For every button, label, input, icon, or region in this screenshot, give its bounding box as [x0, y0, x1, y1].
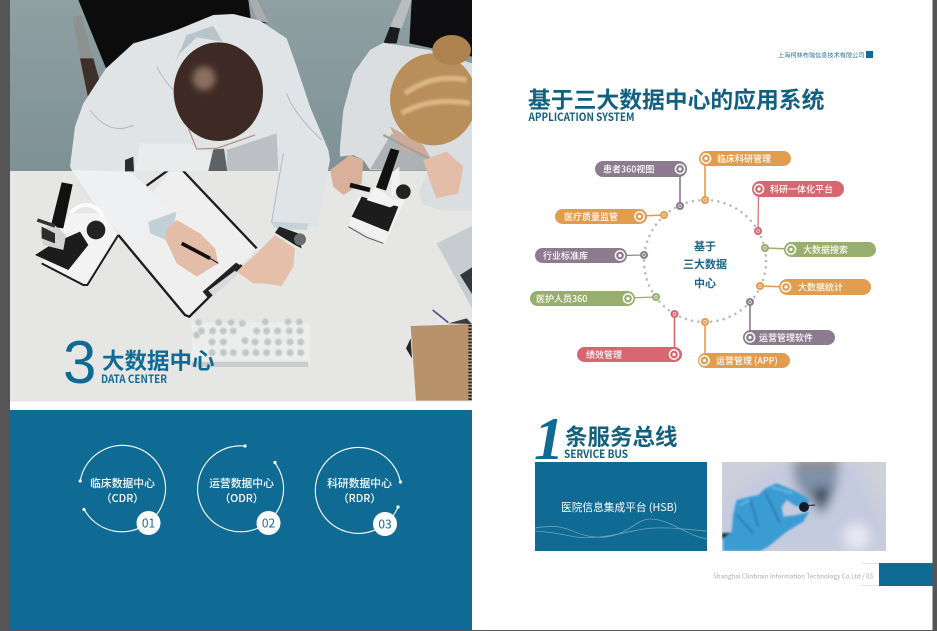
item: research platform: 科研一体化平台 [770, 182, 833, 195]
ring centre text: 三大数据 [683, 256, 727, 272]
data center 01: 01 [142, 514, 155, 532]
item: industry standards [535, 248, 648, 263]
photo: scientists at a lab table [10, 0, 477, 402]
item: patient 360: 患者360视图 [603, 162, 654, 175]
panel: HSB integration platform: 医院信息集成平台 (HSB) [561, 500, 677, 515]
section heading: 1 service bus: 条服务总线 [565, 420, 678, 452]
chairs [78, 0, 268, 68]
data center 03 [315, 447, 402, 536]
item: clinical research [699, 151, 791, 204]
section heading: 3 data center: 大数据中心 [102, 344, 215, 376]
section heading: 3 data center: DATA CENTER [101, 371, 167, 387]
item: operations software [743, 298, 835, 345]
item: operations app: 运营管理 (APP) [716, 354, 778, 367]
item: performance management [577, 310, 682, 362]
footer: Shanghai Clinbrain Information Technology Co.Ltd / 03 [713, 570, 873, 580]
section heading: 3 data center [63, 329, 215, 396]
data center 02: 运营数据中心 [209, 475, 274, 491]
item: medical staff 360: 医护人员360 [536, 292, 587, 305]
item: medical staff 360 [530, 291, 660, 306]
data center 02: （ODR） [219, 490, 264, 506]
test tube rack [192, 323, 310, 367]
item: quality supervision: 医疗质量监管 [564, 210, 618, 223]
data center 01 [79, 445, 166, 535]
section heading: 3 data center: 3 [63, 329, 96, 396]
title: 基于三大数据中心的应用系统 [528, 82, 825, 115]
item: big data search [761, 242, 876, 257]
title: APPLICATION SYSTEM [528, 109, 634, 125]
item: clinical research: 临床科研管理 [717, 152, 771, 165]
item: performance management: 绩效管理 [586, 348, 622, 361]
data center 03: 科研数据中心 [327, 475, 392, 491]
woman [340, 43, 472, 211]
section heading: 1 service bus: 1 [534, 406, 564, 472]
data center 02 [198, 444, 284, 535]
section heading: 1 service bus: SERVICE BUS [564, 446, 628, 462]
panel: HSB integration platform [535, 462, 707, 551]
man's head [174, 26, 223, 65]
data center 01: 临床数据中心 [90, 475, 155, 491]
photo: gloved hand with pen [722, 457, 886, 551]
panel: data centers [10, 410, 472, 630]
item: big data statistics [756, 279, 871, 295]
item: industry standards: 行业标准库 [543, 249, 588, 262]
data center 03: 03 [378, 516, 392, 532]
right microscope [348, 197, 405, 243]
item: patient 360 [595, 161, 687, 210]
data center 01: （CDR） [101, 490, 144, 506]
item: big data search: 大数据搜索 [803, 243, 848, 256]
right page [472, 0, 932, 630]
data center 02: 02 [262, 514, 275, 532]
section heading: 1 service bus [534, 406, 678, 472]
notebook [448, 318, 472, 324]
ring centre text: 基于 [694, 238, 716, 254]
footer [713, 563, 932, 586]
diagram: application systems ring [530, 151, 876, 368]
laptop [437, 226, 472, 308]
left page base [10, 398, 472, 412]
ring centre text [683, 238, 727, 291]
left microscope [42, 213, 118, 285]
item: quality supervision [555, 209, 668, 224]
item: operations software: 运营管理软件 [759, 331, 813, 344]
data center 03: （RDR） [338, 490, 381, 506]
man's hands [166, 220, 218, 277]
item: big data statistics: 大数据统计 [798, 280, 843, 293]
ring centre text: 中心 [694, 275, 716, 291]
man's coat [70, 14, 330, 172]
company name tag: 上海柯林布瑞信息技术有限公司 [778, 50, 865, 60]
clipboard [118, 163, 257, 317]
item: operations app [698, 318, 790, 368]
dotted ring [644, 200, 766, 322]
item: research platform [752, 181, 844, 235]
